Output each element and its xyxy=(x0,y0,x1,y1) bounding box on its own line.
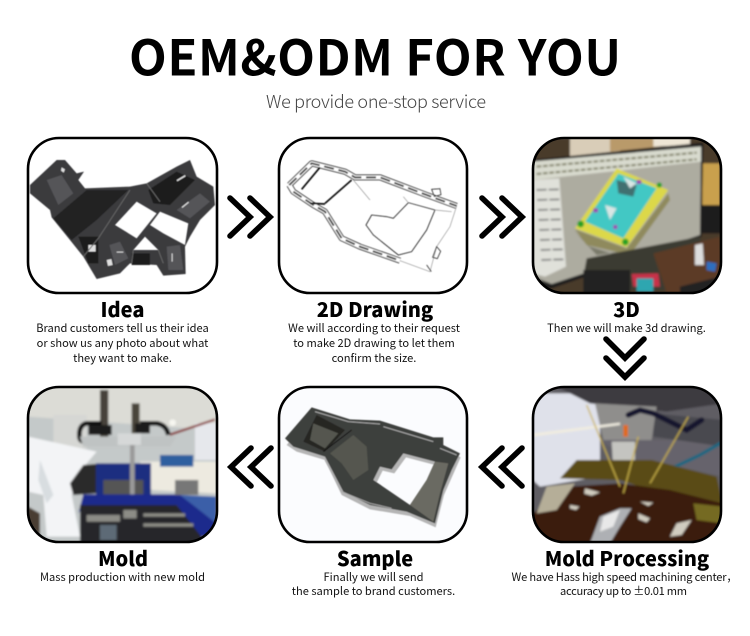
panel: mold xyxy=(28,387,218,585)
subtitle: We provide one-stop service xyxy=(266,88,486,114)
photo: CAD monitor with mold xyxy=(530,138,723,295)
arrow: idea to 2D drawing xyxy=(230,198,270,236)
arrow: sample to mold xyxy=(231,448,271,486)
description xyxy=(36,320,209,366)
title: OEM&ODM FOR YOU xyxy=(129,20,621,90)
panel frame xyxy=(533,138,721,293)
panel frame xyxy=(279,138,467,293)
drawing: part line art xyxy=(286,160,458,272)
description: Brand customers tell us their idea xyxy=(36,320,209,336)
heading: 2D Drawing xyxy=(317,294,433,323)
arrow: 2D drawing to 3D xyxy=(482,198,522,236)
description: confirm the size. xyxy=(332,350,416,366)
description: the sample to brand customers. xyxy=(292,583,455,599)
description: to make 2D drawing to let them xyxy=(293,335,455,351)
heading: Mold Processing xyxy=(545,543,709,572)
heading: Mold xyxy=(98,543,148,572)
heading: 3D xyxy=(613,294,640,323)
description xyxy=(512,569,738,599)
description xyxy=(288,320,461,366)
panel: mold processing xyxy=(512,387,738,599)
photo: injection molding machine xyxy=(28,387,218,543)
description: Then we will make 3d drawing. xyxy=(547,320,706,336)
panel: idea xyxy=(28,138,217,366)
heading: Sample xyxy=(337,543,413,572)
photo: black plastic bracket xyxy=(30,159,216,280)
panel frame xyxy=(28,387,217,542)
description: accuracy up to ±0.01 mm xyxy=(560,583,687,599)
description: or show us any photo about what xyxy=(37,335,209,351)
photo: gray molded part xyxy=(284,406,461,528)
description: Mass production with new mold xyxy=(40,569,205,585)
panel: sample xyxy=(279,387,467,599)
panel frame xyxy=(28,138,217,293)
panel frame xyxy=(279,387,467,542)
description: We have Hass high speed machining center， xyxy=(512,569,738,585)
description: they want to make. xyxy=(73,350,172,366)
photo: CNC machining xyxy=(533,387,723,545)
panel frame xyxy=(533,387,721,542)
heading: Idea xyxy=(101,294,144,323)
panel: 2D drawing xyxy=(279,138,467,366)
description: We will according to their request xyxy=(288,320,461,336)
arrow: mold processing to sample xyxy=(482,448,522,486)
description: Finally we will send xyxy=(324,569,423,585)
description xyxy=(292,569,455,599)
panel: 3D xyxy=(530,138,723,336)
arrow: 3D to mold processing xyxy=(606,339,644,377)
